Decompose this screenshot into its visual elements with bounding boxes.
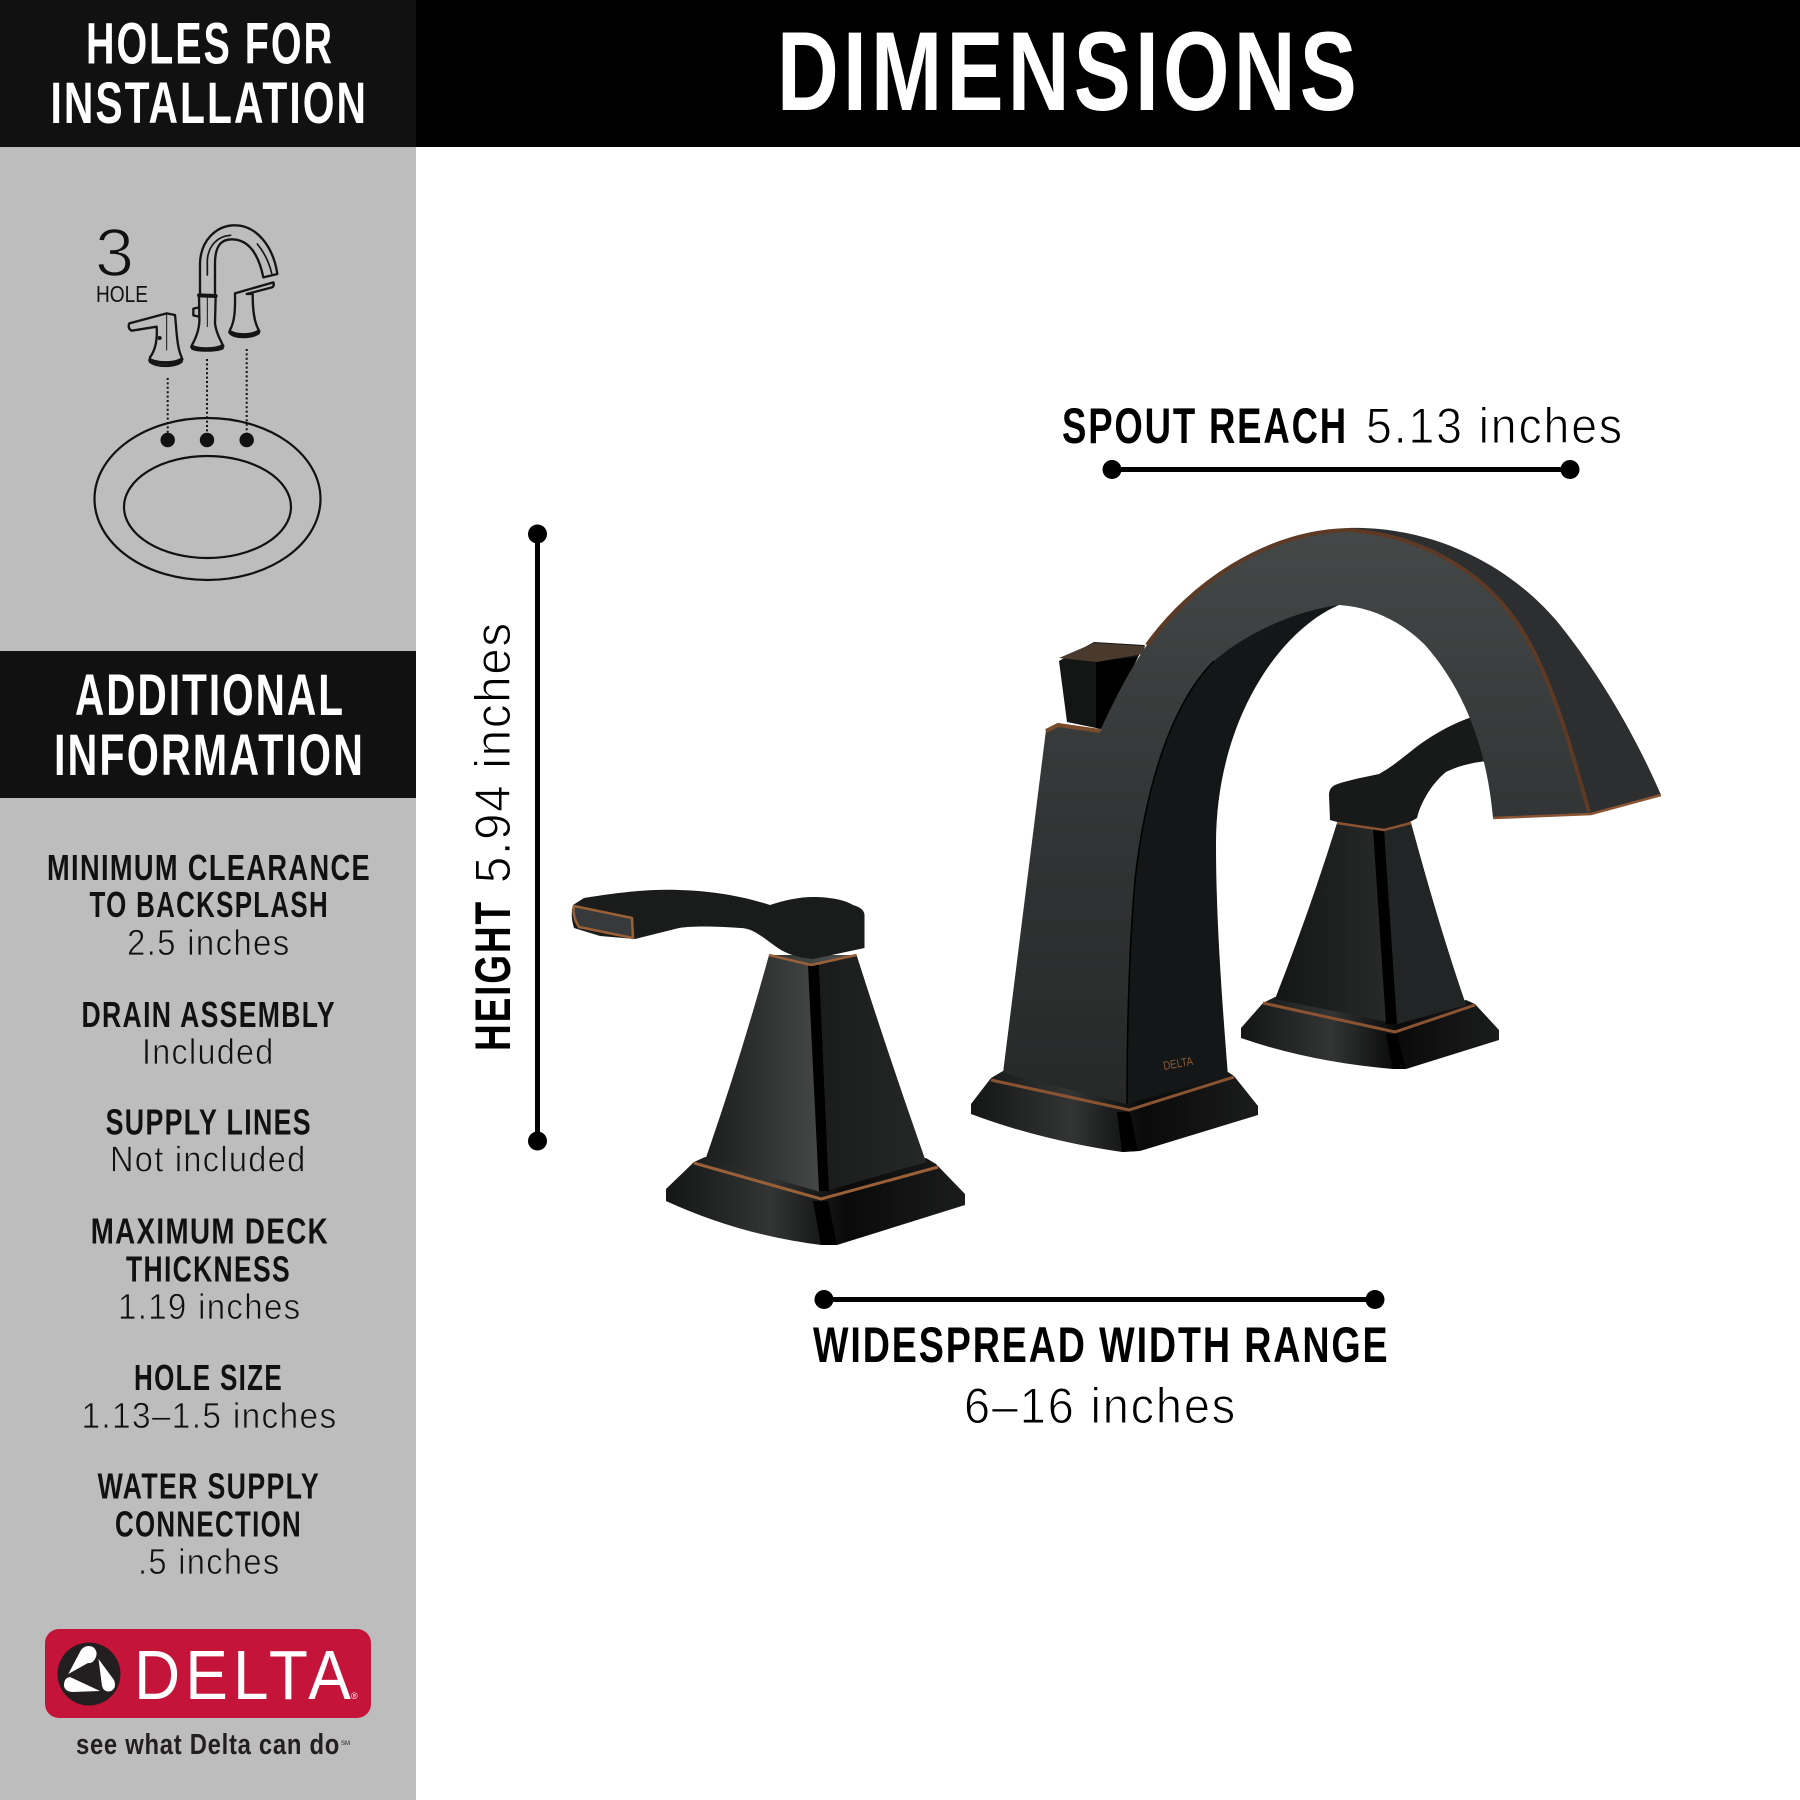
spec: hole size: HOLE SIZE [134,1357,283,1398]
panel: specification list [47,847,371,1582]
spec: maximum deck thickness: 1.19 inches [118,1286,302,1327]
spec: minimum clearance: MINIMUM CLEARANCE [47,847,371,888]
spec: hole size: 1.13–1.5 inches [82,1395,338,1436]
heading: additional information: INFORMATION [54,723,365,788]
spec: drain assembly: Included [142,1031,274,1072]
logo: delta: DELTA [134,1636,356,1714]
right handle [1241,716,1499,1069]
panel: holes for installation header [0,0,416,147]
dimension: widespread width range [813,1290,1390,1434]
dimension: spout reach [1062,398,1624,479]
spec: supply lines: SUPPLY LINES [106,1102,312,1142]
dimension: height: 5.94 inches [465,621,521,883]
dimension: widespread width range: WIDESPREAD WIDTH RANGE [813,1317,1390,1373]
spec: minimum clearance: TO BACKSPLASH [90,884,329,925]
panel: three hole installation diagram [94,215,320,580]
panel: left sidebar [0,0,416,1800]
spec: minimum clearance: 2.5 inches [127,922,290,963]
icon: line drawn faucet [129,225,277,366]
dimension: spout reach: 5.13 inches [1366,398,1624,454]
heading: holes for installation: INSTALLATION [50,71,368,136]
panel: dimensions header bar [416,0,1800,147]
heading: dimensions: DIMENSIONS [777,9,1361,134]
illustration: bronze widespread faucet [572,528,1661,1245]
spec: water supply connection: .5 inches [138,1541,280,1582]
center spout and body [971,528,1661,1152]
heading: holes for installation: HOLES FOR [86,12,334,76]
dimension: widespread width range: 6–16 inches [964,1378,1237,1434]
tagline: see what Delta can do [76,1729,340,1761]
spec: maximum deck thickness: MAXIMUM DECK [91,1210,329,1252]
icon: sink basin [94,418,320,580]
spec: maximum deck thickness: THICKNESS [126,1248,291,1290]
logo: delta: ® [351,1691,358,1701]
heading: additional information: ADDITIONAL [75,663,345,728]
panel: additional information header [0,651,416,798]
spec: water supply connection: WATER SUPPLY [98,1466,320,1506]
label: 3 hole [95,215,148,307]
center spout and body: DELTA [1162,1054,1194,1073]
dimension: height [465,524,547,1150]
dimension: spout reach: SPOUT REACH [1062,398,1348,454]
dimension: height: HEIGHT [465,900,521,1051]
logo: delta: SM [341,1741,350,1747]
label: 3 hole: HOLE [96,281,148,307]
logo: delta [45,1629,371,1761]
label: 3 hole: 3 [95,215,134,291]
spec: supply lines: Not included [110,1138,306,1180]
spec: drain assembly: DRAIN ASSEMBLY [82,994,336,1035]
spec: water supply connection: CONNECTION [115,1504,302,1544]
icon: dotted guide lines and holes [160,349,254,447]
left handle [572,890,965,1245]
